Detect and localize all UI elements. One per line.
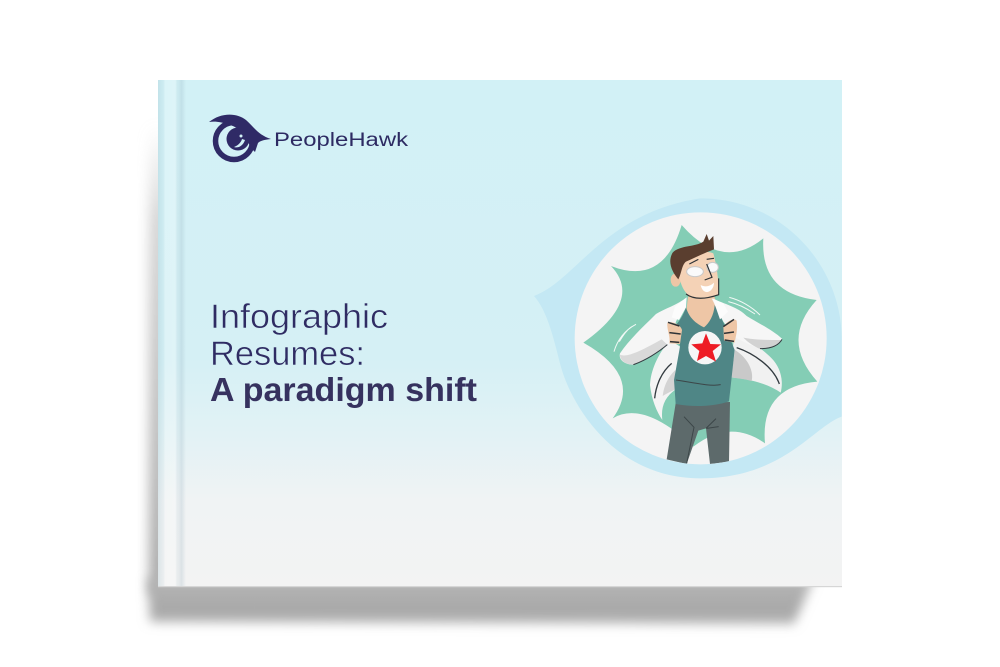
logo wordmark: PeopleHawk [274,130,409,151]
star emblem [688,331,722,364]
motion lines [614,297,760,352]
speech bubble outer shape [534,198,842,478]
trousers [667,402,730,464]
logo: PeopleHawk [209,115,409,160]
hands [667,319,737,344]
icon: hawk eye [209,115,271,160]
title line 1: Infographic [210,298,388,336]
cover background [158,80,842,587]
man figure [614,234,782,464]
smile [701,283,714,292]
title line 2: Resumes: [210,335,365,373]
title line 3: A paradigm shift [210,371,477,408]
t-shirt [674,305,735,406]
coat sleeves and collar [620,297,782,365]
book spine [158,80,186,587]
coat back flaps [650,337,782,420]
neck [686,296,722,328]
book drop shadow [148,125,814,624]
white disc [575,212,827,464]
title [210,298,477,408]
head [670,234,719,298]
green burst [583,225,817,447]
book cover [158,80,842,587]
glasses [687,267,703,277]
shirt and trouser folds [676,380,721,463]
illustration: superhero man in bubble [534,198,842,478]
